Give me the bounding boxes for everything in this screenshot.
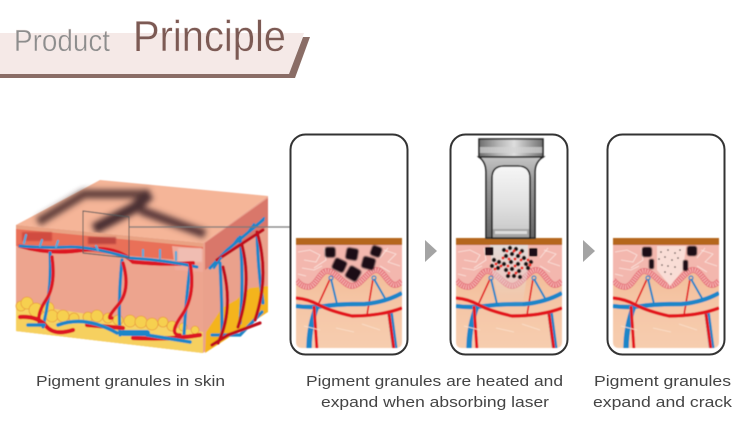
panel 2 frame bbox=[450, 134, 568, 354]
header banner bbox=[0, 23, 310, 78]
arrow 2 bbox=[583, 240, 595, 262]
caption 3 bbox=[593, 373, 733, 411]
panel 1 frame bbox=[290, 134, 408, 354]
title word: Principle: Principle bbox=[133, 12, 286, 61]
right face bbox=[203, 196, 268, 353]
caption 2: expand when absorbing laser bbox=[321, 394, 549, 411]
arrow 1 bbox=[425, 240, 437, 262]
panel 3 skin with cracked granules bbox=[613, 238, 719, 350]
skin block illustration bbox=[16, 180, 290, 353]
pigment patches bbox=[22, 232, 202, 262]
caption 2 bbox=[306, 373, 563, 411]
selection frame and connector bbox=[83, 211, 290, 258]
laser handpiece bbox=[479, 139, 543, 238]
caption 3: expand and crack bbox=[593, 394, 733, 411]
top face with pigment bbox=[16, 180, 268, 243]
title word: Product: Product bbox=[14, 23, 110, 58]
panel 2 skin with heated granules bbox=[456, 238, 562, 350]
panel 1 skin with pigment granules bbox=[296, 238, 402, 350]
fat layer bbox=[16, 286, 268, 353]
front face bbox=[16, 225, 203, 353]
panel 3 frame bbox=[608, 134, 724, 354]
caption 1: Pigment granules in skin bbox=[36, 373, 225, 390]
caption 2: Pigment granules are heated and bbox=[306, 373, 563, 390]
blood vessels bbox=[20, 218, 264, 345]
caption 3: Pigment granules bbox=[594, 373, 731, 390]
